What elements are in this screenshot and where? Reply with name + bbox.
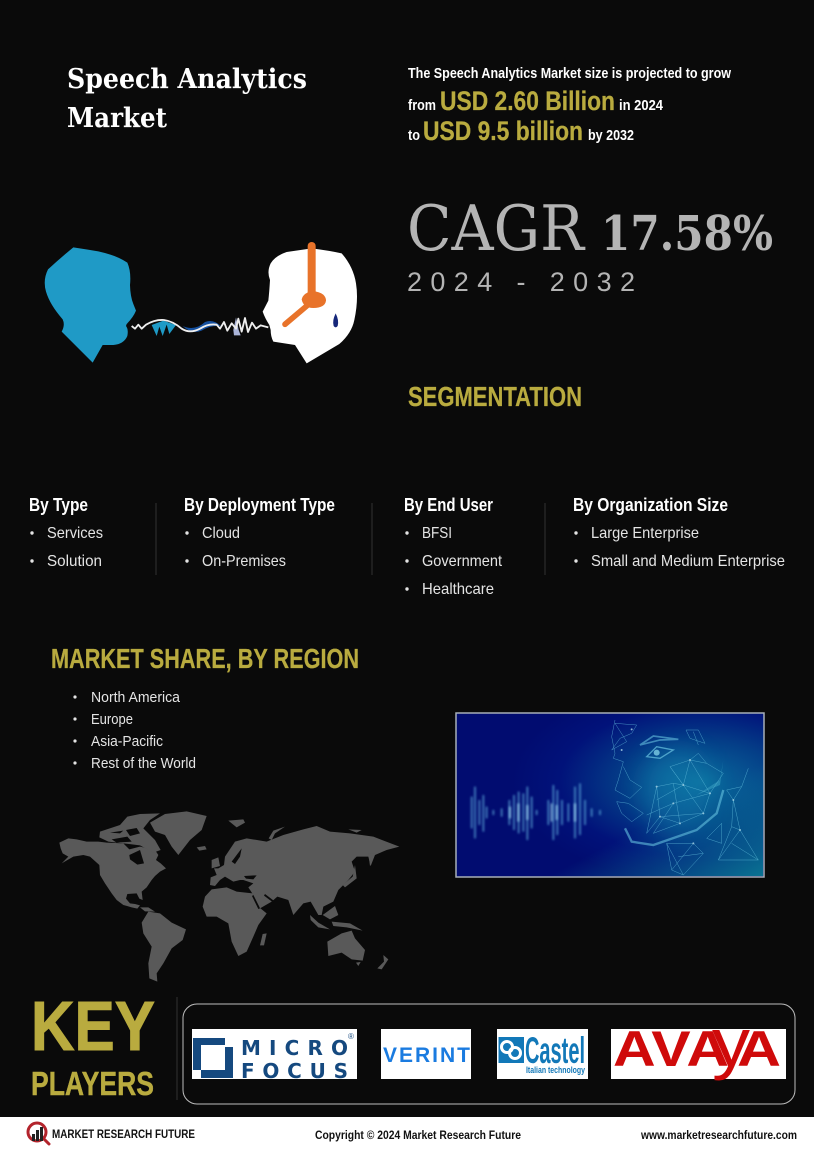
segment: by deployment type: Cloud xyxy=(202,525,240,542)
key players heading: PLAYERS xyxy=(31,1065,154,1102)
segment: by organization size: Small and Medium Enterprise xyxy=(591,553,785,570)
market size summary: The Speech Analytics Market size is projected to grow xyxy=(408,66,732,82)
logo: Micro Focus: ® xyxy=(348,1032,354,1041)
logo: Castel: Italian technology xyxy=(526,1065,585,1075)
segment: by deployment type xyxy=(184,495,335,570)
segment: by type: By Type xyxy=(29,495,88,515)
logo: Avaya: A xyxy=(737,1021,781,1077)
segment: by end user: Healthcare xyxy=(422,581,494,598)
CAGR: CAGR xyxy=(407,192,585,265)
sound wave xyxy=(132,317,268,336)
market size summary: by 2032 xyxy=(588,128,634,144)
segment: by organization size: By Organization Size xyxy=(573,495,728,515)
market size summary: USD 9.5 billion xyxy=(423,116,583,146)
CAGR: 2024 - 2032 xyxy=(407,267,635,297)
CAGR xyxy=(407,192,773,297)
segment: by deployment type: By Deployment Type xyxy=(184,495,335,515)
market size summary: to xyxy=(408,128,420,144)
illustration: two heads talking xyxy=(45,246,357,363)
world map xyxy=(59,811,399,982)
logo: Micro Focus: FOCUS xyxy=(241,1059,348,1083)
segment: by organization size xyxy=(573,495,785,570)
region list: North America xyxy=(91,690,181,706)
region list xyxy=(73,690,196,772)
region list: Europe xyxy=(91,712,133,728)
region list: Rest of the World xyxy=(91,756,196,772)
logo: Avaya: AVA xyxy=(613,1021,729,1077)
segment: by deployment type: On-Premises xyxy=(202,553,286,570)
icon: white head with orange headset xyxy=(263,246,357,363)
title xyxy=(67,64,307,134)
logo: Avaya: y xyxy=(712,1004,751,1081)
title: Speech Analytics xyxy=(67,64,307,95)
segment: by type xyxy=(29,495,103,570)
photo: AI face and voice wave xyxy=(456,713,764,877)
segment: by type: Services xyxy=(47,525,103,542)
heading: market share by region: MARKET SHARE, BY REGION xyxy=(51,643,359,674)
title: Market xyxy=(67,103,167,134)
market size summary xyxy=(408,66,732,146)
segment: by end user xyxy=(404,495,502,598)
key players panel xyxy=(183,1004,795,1104)
segment: by end user: BFSI xyxy=(422,525,452,542)
market size summary: USD 2.60 Billion xyxy=(440,86,615,116)
icon: Market Research Future logo xyxy=(28,1123,49,1144)
mesh face xyxy=(612,720,758,875)
heading: segmentation: SEGMENTATION xyxy=(408,381,582,412)
voice waveform xyxy=(465,783,615,840)
footer: MARKET RESEARCH FUTURE xyxy=(52,1127,195,1141)
logo: Verint: VERINT xyxy=(383,1044,470,1067)
logo: Castel xyxy=(497,1029,588,1079)
segment: by end user: By End User xyxy=(404,495,493,515)
icon: blue head xyxy=(45,247,136,363)
key players heading xyxy=(31,987,155,1102)
logo: Micro Focus: MICRO xyxy=(241,1036,348,1060)
footer xyxy=(0,1117,814,1150)
logo: Micro Focus xyxy=(192,1029,357,1083)
logo: Verint xyxy=(381,1029,471,1079)
logo: Castel: Castel xyxy=(525,1030,585,1071)
segment: by type: Solution xyxy=(47,553,102,570)
region list: Asia-Pacific xyxy=(91,734,163,750)
market size summary: in 2024 xyxy=(619,98,663,114)
footer: Copyright © 2024 Market Research Future xyxy=(315,1128,521,1142)
market size summary: from xyxy=(408,98,436,114)
segment: by end user: Government xyxy=(422,553,502,570)
segment: by organization size: Large Enterprise xyxy=(591,525,699,542)
key players heading: KEY xyxy=(31,987,155,1065)
CAGR: 17.58% xyxy=(601,206,773,262)
logo: Avaya xyxy=(611,1004,786,1081)
